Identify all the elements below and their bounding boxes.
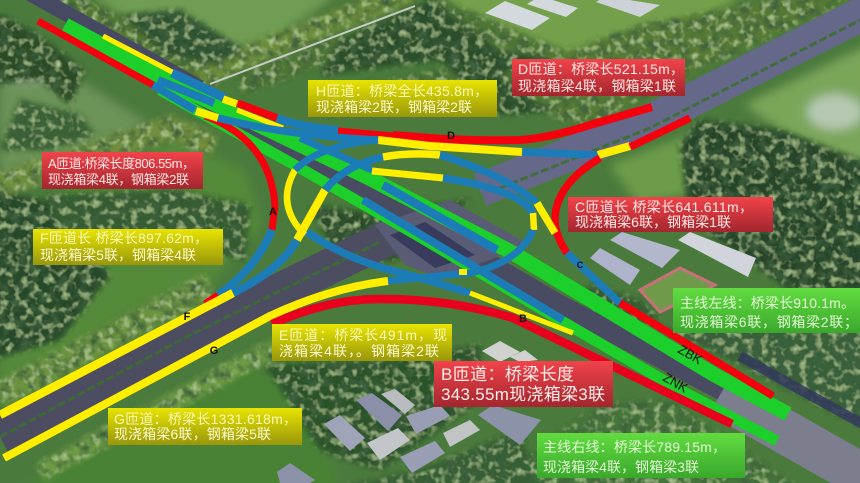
inner ramp: yellow mark xyxy=(459,269,467,275)
road: upper diagonal xyxy=(210,6,415,84)
tree belt: left cross road xyxy=(0,128,215,185)
route letter: G: G xyxy=(210,345,218,357)
main line left: green xyxy=(65,25,788,414)
ramp A: red xyxy=(205,116,275,230)
callout: H ramp xyxy=(308,80,497,117)
inner ramp: blue upper xyxy=(300,138,372,170)
callout: main line left: 现浇箱梁6联，钢箱梁2联； xyxy=(680,314,858,331)
ramp C: blue xyxy=(567,253,620,303)
road: main line lower right xyxy=(720,395,860,480)
callout: A ramp: A匝道:桥梁长度806.55m， xyxy=(48,156,195,171)
road: dark right carriageway xyxy=(740,356,860,428)
road: cross road left xyxy=(0,232,400,437)
ramp H: red right xyxy=(338,131,393,136)
grass field: top centre xyxy=(440,0,745,80)
route letter: D: D xyxy=(447,130,455,142)
callout: B ramp: B匝道：桥梁长度 xyxy=(441,365,574,384)
ramp F: blue rising xyxy=(325,157,383,190)
tree belt: lower upper diagonal xyxy=(240,10,560,100)
route letter: F: F xyxy=(184,311,191,323)
callout: main line right: 现浇箱梁4联，钢箱梁3联 xyxy=(543,459,699,475)
inner ramp: yellow stub xyxy=(533,213,534,230)
callout: F ramp xyxy=(33,229,223,265)
callout: A ramp xyxy=(42,152,203,189)
building: dorm 3 xyxy=(678,232,756,277)
mist: left field xyxy=(0,62,55,82)
road: centre plaza xyxy=(375,200,530,278)
trees: north H label xyxy=(320,0,570,115)
main line: top yellow xyxy=(103,36,178,75)
callout: G ramp: G匝道：桥梁长1331.618m， xyxy=(114,411,297,427)
callout: C ramp xyxy=(568,197,773,232)
trees: interchange centre xyxy=(310,200,470,262)
callout: D ramp: 现浇箱梁4联，钢箱梁1联 xyxy=(518,78,676,94)
route letter: C: C xyxy=(577,260,584,270)
callout: E ramp: E匝道：桥梁长491m，现 xyxy=(279,327,447,343)
main line right: blue span xyxy=(363,200,563,320)
trees: far left xyxy=(0,10,85,105)
grass field: left lower xyxy=(0,140,262,410)
callout: main line left: 主线左线：桥梁长910.1m。 xyxy=(680,295,855,311)
ramp E-B: red xyxy=(272,299,732,424)
building: south 10 xyxy=(482,341,520,362)
grass field: left xyxy=(0,65,150,190)
building: south 7 xyxy=(443,420,480,447)
trees: south right xyxy=(660,320,860,430)
callout: F ramp: 现浇箱梁5联，钢箱梁4联 xyxy=(40,247,196,263)
callout: H ramp: H匝道：桥梁全长435.8m， xyxy=(316,83,488,99)
trees: top centre clusters xyxy=(120,10,245,65)
callout: E ramp xyxy=(272,324,452,361)
main line left: blue span xyxy=(383,185,497,250)
trees: centre right xyxy=(580,285,660,330)
main line: blue lower xyxy=(153,85,195,110)
ring: yellow tail xyxy=(470,293,573,333)
callout: F ramp: F匝道长 桥梁长897.62m， xyxy=(40,230,208,246)
route letter: B: B xyxy=(519,313,527,325)
trees: bottom right belt xyxy=(480,400,800,483)
main line left: red xyxy=(38,21,153,85)
grass field: top left xyxy=(85,0,340,75)
callout: B ramp: 343.55m现浇箱梁3联 xyxy=(441,385,605,404)
centre: long blue ramp xyxy=(218,118,378,140)
tree belt: along main road top xyxy=(60,0,215,85)
road: underpass xyxy=(390,222,475,268)
road: main line xyxy=(200,95,740,400)
trees: bottom strip xyxy=(330,430,540,483)
building: south 11 xyxy=(510,350,538,362)
trees: left lower xyxy=(0,190,110,360)
building: dorm 1 xyxy=(590,248,640,285)
mist: right field xyxy=(807,94,860,130)
route letter: A: A xyxy=(269,206,277,218)
tree belt: G ramp xyxy=(40,345,280,472)
main line: blue middle xyxy=(158,80,214,103)
buildings xyxy=(277,0,756,483)
ring: blue lower xyxy=(307,232,470,293)
ramp C: red curve xyxy=(555,158,600,253)
callout: G ramp: 现浇箱梁6联，钢箱梁5联 xyxy=(114,426,271,442)
route letter: ZNK: ZNK xyxy=(660,370,691,396)
ramp F: blue xyxy=(233,240,297,293)
callout: A ramp: 现浇箱梁4联，钢箱梁2联 xyxy=(48,172,189,187)
tree belt: F ramp xyxy=(0,285,210,395)
ramp F: yellow xyxy=(0,293,233,415)
ramp D: yellow end xyxy=(598,146,630,155)
main line: yellow under ramp xyxy=(237,110,283,128)
ramp F: yellow rising xyxy=(297,190,325,240)
callout: D ramp xyxy=(512,59,685,96)
building: south 6 xyxy=(478,405,541,445)
grass field: centre right xyxy=(610,135,700,205)
route letter: ZBK: ZBK xyxy=(676,342,705,367)
inner ramp: yellow xyxy=(372,171,443,178)
building: south 9 xyxy=(277,463,315,483)
ramp D: yellow xyxy=(378,140,522,152)
grass field: bottom xyxy=(20,365,340,483)
trees: cluster south of A label xyxy=(45,190,250,260)
grass field: right xyxy=(745,45,860,165)
ramp F: yellow top arc xyxy=(383,154,440,157)
ramp F: yellow end xyxy=(537,203,555,233)
callout: G ramp xyxy=(108,408,302,445)
ramp A: red tail xyxy=(205,295,218,304)
ramp H: blue xyxy=(277,118,338,130)
building: warehouse 3 xyxy=(596,0,660,17)
road: cross road right median xyxy=(500,15,860,188)
ramp C: red lower xyxy=(620,303,773,396)
callout: H ramp: 现浇箱梁2联，钢箱梁2联 xyxy=(316,99,472,115)
trees: left middle xyxy=(0,100,95,150)
road: cross road left median xyxy=(0,242,380,437)
main line: blue top xyxy=(172,73,225,98)
ramp G: yellow xyxy=(4,281,388,458)
building: south 3 xyxy=(367,428,410,460)
tree belt: upper left of ramp D xyxy=(500,0,860,125)
ring: blue upper xyxy=(295,140,378,170)
ramp H: yellow stub xyxy=(223,99,237,104)
trees: right big xyxy=(680,120,860,290)
ring: yellow left xyxy=(287,170,305,235)
building: south 5 xyxy=(381,389,415,414)
callout: C ramp: 现浇箱梁6联，钢箱梁1联 xyxy=(575,214,731,230)
callout: main line right: 主线右线：桥梁长789.15m， xyxy=(543,439,726,455)
tree belt: upper diagonal xyxy=(200,0,415,75)
building: dorm 2 xyxy=(610,232,680,268)
ramp D: blue xyxy=(522,152,598,155)
callout: E ramp: 浇箱梁4联，。钢箱梁2联 xyxy=(279,343,439,359)
building: south 2 xyxy=(324,415,365,451)
ramp D: red xyxy=(393,107,652,140)
ramp F: blue top arc xyxy=(440,155,537,203)
inner ramp: blue return xyxy=(387,230,533,281)
building: south 1 xyxy=(356,393,402,431)
trees: bottom centre xyxy=(265,345,480,470)
ramp C: red end xyxy=(630,118,690,147)
inner ramp: blue arc xyxy=(443,178,533,213)
building: warehouse 1 xyxy=(485,1,550,30)
main line right: green xyxy=(160,90,777,441)
road: cross road right xyxy=(480,10,860,190)
ramp A: blue lower xyxy=(218,230,272,295)
callout: C ramp: C匝道长 桥梁长641.611m， xyxy=(575,199,753,215)
building: warehouse 2 xyxy=(527,0,578,17)
callout: D ramp: D匝道：桥梁长521.15m， xyxy=(518,61,684,77)
ramp H: red left xyxy=(237,103,277,118)
building: south 8 xyxy=(400,441,445,473)
callout: main line right xyxy=(537,433,745,478)
sports field xyxy=(640,268,715,312)
callout: main line left xyxy=(673,288,860,333)
building: south 4 xyxy=(406,405,450,434)
ramp A: yellow start xyxy=(196,111,218,118)
callout: B ramp xyxy=(434,361,613,407)
road: main line top xyxy=(28,0,200,88)
